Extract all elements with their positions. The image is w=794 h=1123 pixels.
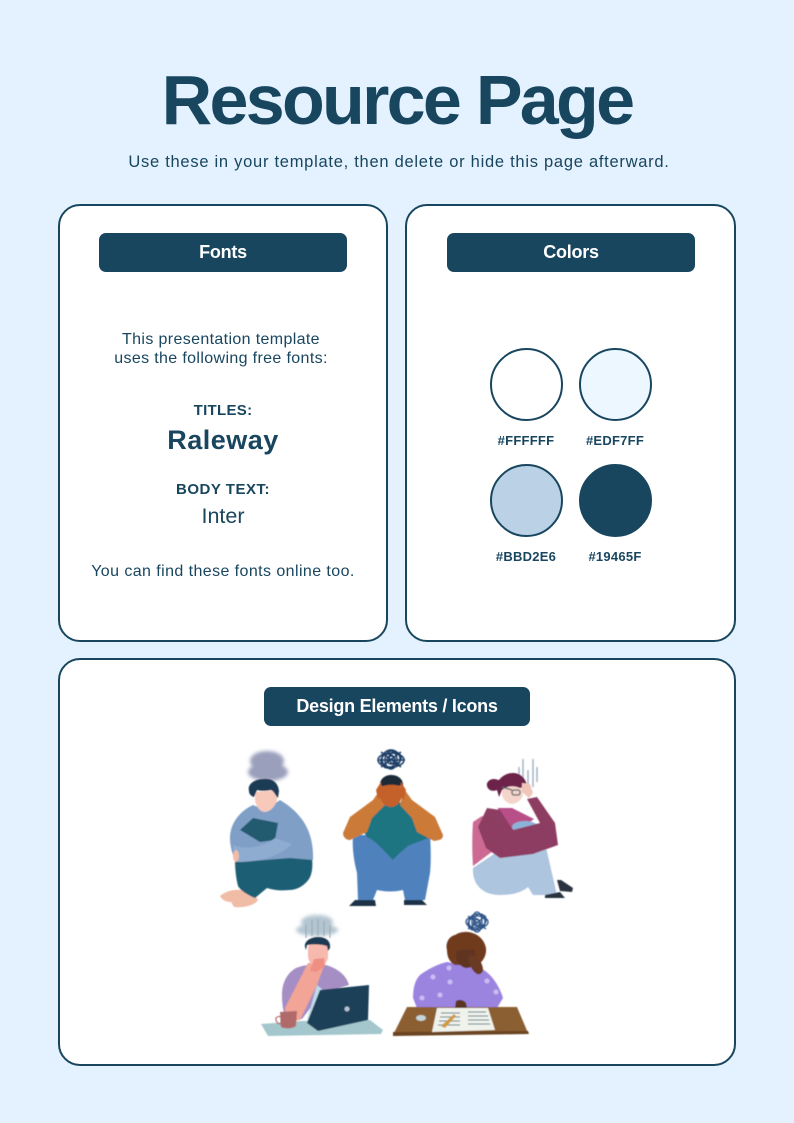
font name: Inter: Inter [201,504,245,528]
text: fonts intro: This presentation template [122,331,320,348]
panel: fonts [58,204,388,642]
font name: Raleway: Raleway [167,425,279,455]
swatch: light blue [490,464,563,537]
label: body text: BODY TEXT: [176,481,270,498]
hex label: FFFFFF: #FFFFFF [498,433,554,448]
heading: fonts [99,233,347,272]
label: titles: TITLES: [194,402,252,419]
heading: fonts: Fonts [199,242,247,262]
icon: person reading at desk [393,912,529,1036]
text: fonts intro [114,331,328,367]
title: Resource Page [162,61,632,139]
hex label: EDF7FF: #EDF7FF [586,433,644,448]
text: fonts intro: uses the following free fonts: [114,350,328,367]
heading: design elements: Design Elements / Icons [296,696,498,716]
panel: colors [405,204,736,642]
text: fonts note: You can find these fonts online too. [91,563,355,580]
icon: person with glasses [472,759,573,898]
icon: person holding head [343,750,443,906]
hex label: BBD2E6: #BBD2E6 [496,549,556,564]
icon: person at laptop [261,915,383,1036]
heading: colors: Colors [543,242,599,262]
swatch: pale blue [579,348,652,421]
hex label: 19465F: #19465F [588,549,642,564]
icon: person with cloud [220,751,313,907]
swatch: dark blue [579,464,652,537]
panel: design elements [58,658,736,1066]
swatch: white [490,348,563,421]
heading: colors [447,233,695,272]
heading: design elements [264,687,530,726]
subtitle: Use these in your template, then delete or hide this page afterward. [128,153,670,171]
